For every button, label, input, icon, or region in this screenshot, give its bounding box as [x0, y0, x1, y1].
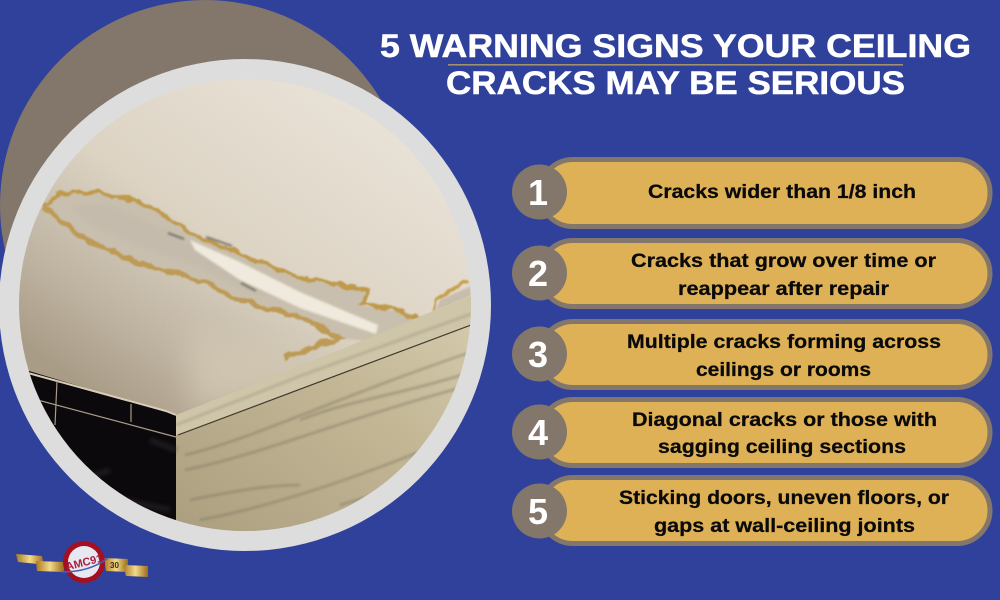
list item 2: reappear after repair — [678, 279, 890, 300]
list item 4: sagging ceiling sections — [658, 437, 906, 458]
ceiling beam — [176, 295, 471, 531]
title: CRACKS MAY BE SERIOUS — [446, 65, 905, 101]
list item 5: Sticking doors, uneven floors, or — [619, 488, 950, 509]
peeling paint — [190, 240, 378, 334]
logo: AMC911 ribbon badge — [16, 541, 148, 583]
list item 3 — [512, 322, 990, 388]
list item 2: 2 — [528, 253, 548, 294]
photo: water-damaged ceiling — [19, 79, 471, 531]
list item 4 — [512, 400, 990, 466]
water stain — [44, 192, 471, 358]
list item 1: 1 — [528, 172, 548, 213]
list item 5: gaps at wall-ceiling joints — [654, 516, 915, 537]
list item 3: 3 — [528, 334, 548, 375]
list item 5: 5 — [528, 491, 548, 532]
title underline — [448, 64, 903, 66]
black tile wall — [28, 370, 178, 520]
logo: AMC911 ribbon badge: 30 — [110, 561, 119, 570]
list item 4: 4 — [528, 412, 548, 453]
list item 3: ceilings or rooms — [696, 360, 871, 381]
list item 2: Cracks that grow over time or — [631, 251, 937, 272]
title: 5 WARNING SIGNS YOUR CEILING — [380, 28, 971, 64]
list item 3: Multiple cracks forming across — [627, 332, 941, 353]
list item 1 — [512, 160, 990, 226]
decorative brown circle — [0, 0, 410, 410]
list item 5 — [512, 478, 990, 544]
logo: AMC911 ribbon badge: AMC91 — [65, 553, 104, 573]
photo frame ring — [0, 59, 491, 551]
list item 4: Diagonal cracks or those with — [632, 410, 937, 431]
title — [380, 28, 971, 101]
list item 1: Cracks wider than 1/8 inch — [648, 182, 916, 203]
list item 2 — [512, 240, 990, 306]
